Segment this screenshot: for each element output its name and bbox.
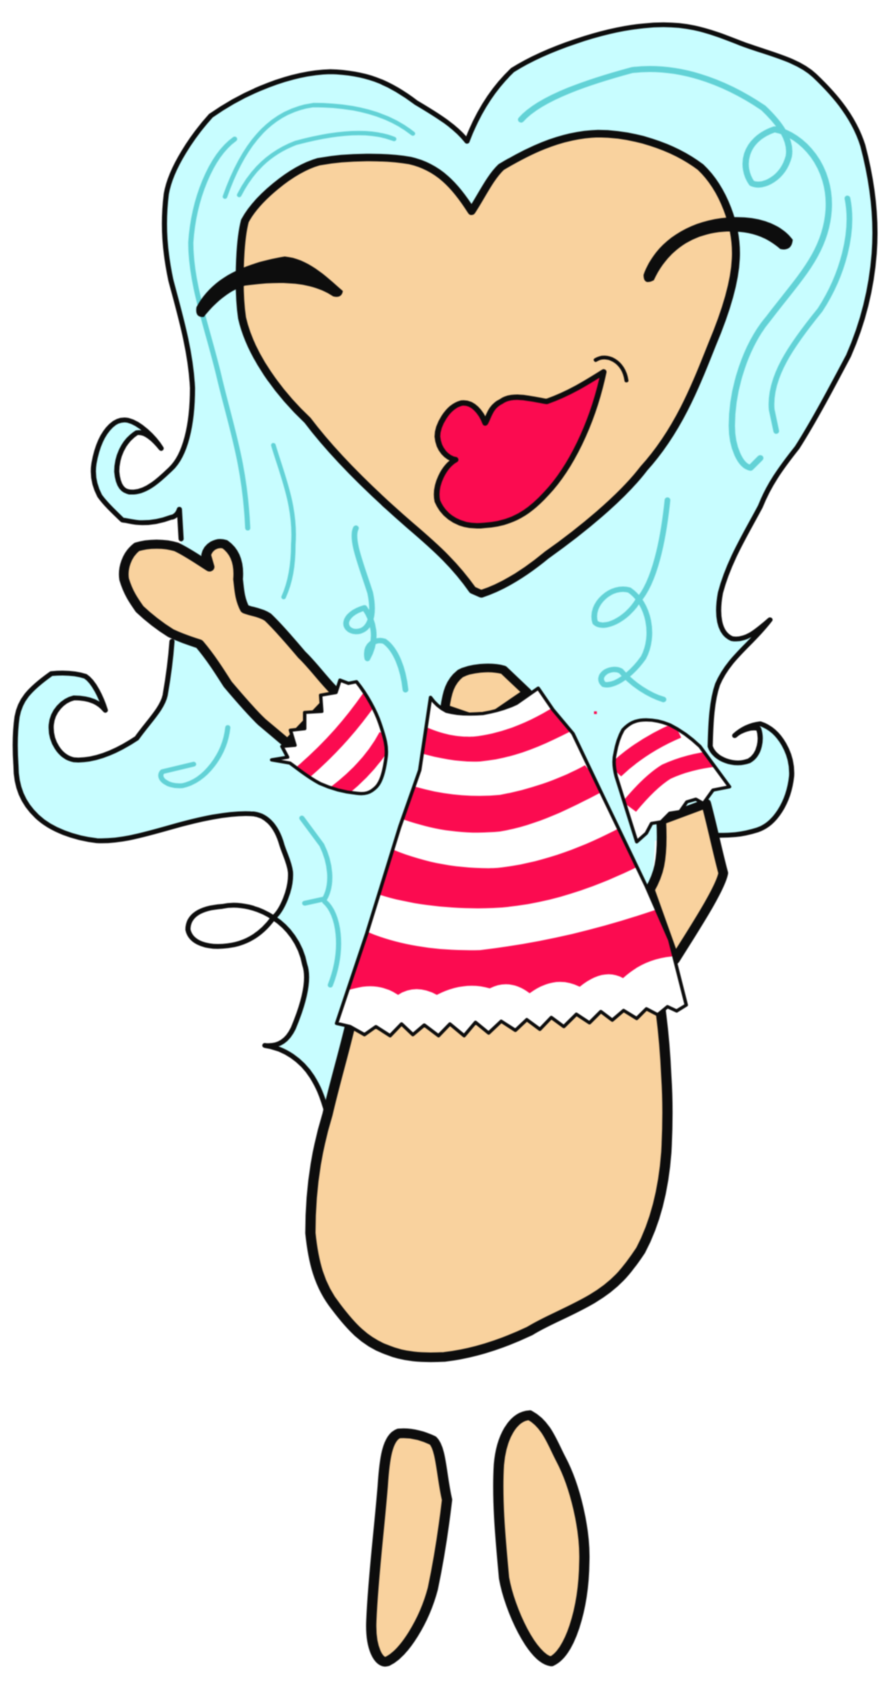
hair strands	[161, 69, 849, 985]
right leg	[498, 1415, 584, 1661]
face	[240, 134, 736, 594]
right arm	[650, 804, 723, 960]
neck	[445, 668, 527, 722]
smile dimple	[596, 357, 626, 380]
hair	[15, 25, 875, 1114]
left arm and hand	[124, 544, 336, 744]
right sleeve	[614, 720, 730, 842]
left sleeve	[272, 680, 387, 794]
left eye	[196, 257, 343, 317]
shirt stripes	[342, 706, 681, 995]
hair outline	[15, 25, 875, 1114]
shirt	[337, 688, 686, 1036]
left leg	[371, 1433, 447, 1662]
body	[310, 1002, 667, 1357]
shirt outline	[337, 688, 686, 1036]
right eye	[644, 217, 793, 282]
mouth	[437, 372, 604, 526]
red speck	[594, 711, 597, 714]
